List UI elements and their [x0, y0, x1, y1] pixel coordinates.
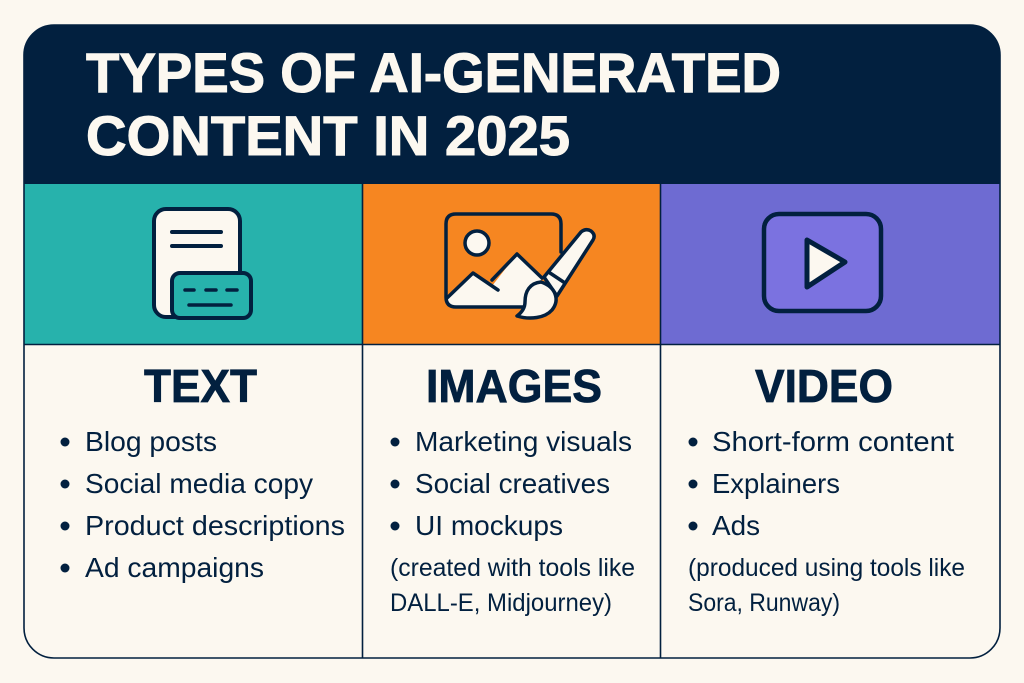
list: text items: Blog posts	[85, 426, 217, 457]
heading: text: TEXT	[144, 360, 257, 412]
title: CONTENT IN 2025	[86, 104, 570, 167]
heading: video: VIDEO	[755, 360, 893, 412]
list: video items: Short-form content	[712, 426, 954, 457]
list: text items: Ad campaigns	[85, 552, 264, 583]
note: video tools	[688, 554, 965, 617]
title	[86, 41, 781, 167]
note: video tools: (produced using tools like	[688, 554, 965, 582]
list: image items: Marketing visuals	[415, 426, 632, 457]
icon: video play button	[764, 214, 881, 311]
colored panels and header	[24, 26, 1000, 344]
list: video items: Explainers	[712, 468, 840, 499]
icon: document with text box	[154, 209, 251, 318]
icon: image with paintbrush	[446, 214, 594, 318]
list: image items: UI mockups	[415, 510, 563, 541]
list: image items	[390, 426, 632, 541]
list: video items	[688, 426, 954, 541]
list: image items: Social creatives	[415, 468, 610, 499]
panel: images	[390, 360, 635, 617]
panel: text	[60, 360, 345, 583]
note: image tools	[390, 554, 635, 617]
note: image tools: DALL-E, Midjourney)	[390, 589, 612, 617]
note: image tools: (created with tools like	[390, 554, 635, 582]
list: text items: Social media copy	[85, 468, 313, 499]
list: video items: Ads	[712, 510, 760, 541]
heading: images: IMAGES	[426, 360, 602, 412]
panel: video	[688, 360, 965, 617]
list: text items: Product descriptions	[85, 510, 345, 541]
list: text items	[60, 426, 345, 583]
note: video tools: Sora, Runway)	[688, 589, 840, 617]
title: TYPES OF AI-GENERATED	[86, 41, 781, 104]
